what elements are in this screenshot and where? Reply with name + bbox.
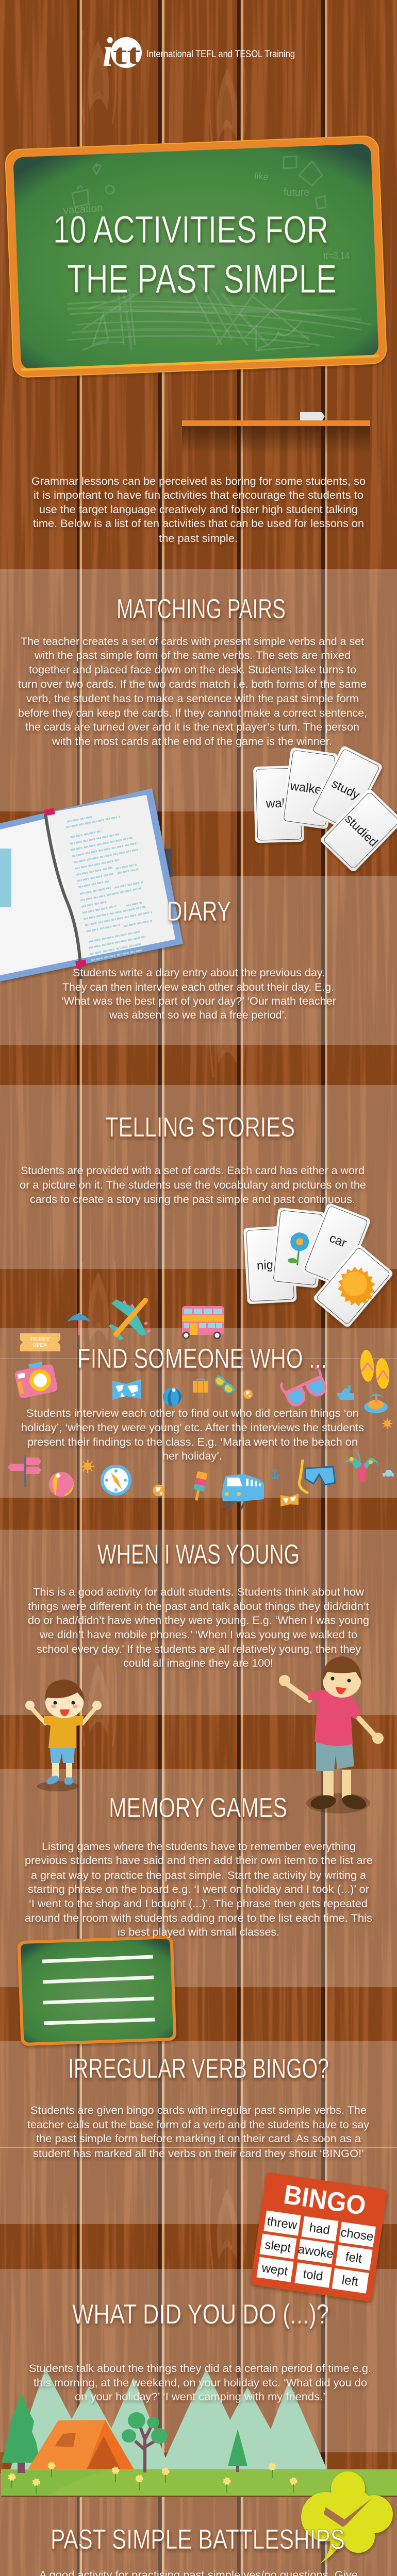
- icon: flip flops: [359, 1349, 390, 1389]
- chalkboard with title: [5, 135, 387, 378]
- body text: the cards are turned over and it is the next player’s turn. The person: [25, 721, 359, 733]
- body text: Students write a diary entry about the previous day.: [73, 967, 325, 979]
- body text: [21, 1408, 364, 1462]
- panel band: matching pairs: [0, 570, 397, 811]
- icon: beach umbrella: [67, 1313, 91, 1335]
- chalk smudges and doodles: [67, 156, 371, 350]
- icon: airplane: [109, 1299, 151, 1341]
- illustration: word cards: walked: [289, 779, 329, 798]
- icon: ticket: TICKET: [30, 1336, 50, 1342]
- panel: what did you do: [1, 2299, 397, 2497]
- icon: small globe: [243, 1389, 253, 1399]
- icon: small car: [383, 1470, 394, 1478]
- panel band: find someone who: [0, 1328, 397, 1498]
- illustration: open diary: [0, 788, 183, 981]
- icon: ticket: [20, 1333, 60, 1351]
- intro text: [31, 476, 366, 545]
- round tree: [122, 2412, 168, 2472]
- panel band: what did you do: [0, 2269, 397, 2452]
- panel band: when I was young: [0, 1530, 397, 1715]
- body text: is best played with small classes.: [118, 1926, 279, 1938]
- panel: telling stories: [20, 1112, 394, 1329]
- body text: was absent so we had a free period’.: [109, 1009, 287, 1021]
- panel band: telling stories: [0, 1085, 397, 1269]
- intro text: time. Below is a list of ten activities that can be used for lessons on: [33, 518, 364, 530]
- illustration: bingo card: BINGO: [282, 2180, 368, 2221]
- heading: TELLING STORIES: [105, 1112, 295, 1143]
- illustration: story cards: car: [327, 1231, 349, 1250]
- flowers: [9, 2463, 296, 2494]
- heading: DIARY: [167, 896, 231, 927]
- body text: this morning, at the weekend, on your holiday etc. ‘What did you do: [34, 2377, 367, 2389]
- icon: double decker bus: [182, 1306, 224, 1338]
- icon: globe: [153, 1485, 165, 1496]
- mountains: [10, 2368, 327, 2469]
- body text: Students are provided with a set of cards. Each card has either a word: [21, 1165, 365, 1177]
- heading: MEMORY GAMES: [109, 1792, 287, 1823]
- body text: around the room with students adding more to the list each time. This: [25, 1912, 372, 1924]
- illustration: bingo card: told: [302, 2267, 324, 2284]
- icon: ship: [337, 1385, 354, 1400]
- panel: when I was young: [25, 1539, 384, 1814]
- illustration: bingo card: awoke: [297, 2242, 335, 2261]
- icon: snorkel mask: [299, 1460, 335, 1493]
- body text: This is a good activity for adult students. Students think about how: [33, 1586, 365, 1598]
- body text: [29, 2363, 371, 2403]
- illustration: bingo card: had: [308, 2221, 331, 2238]
- body text: [28, 1586, 369, 1669]
- panel: find someone who: [8, 1299, 394, 1511]
- body text: [20, 1165, 366, 1206]
- panel band: memory games: [0, 1769, 397, 1987]
- icon: suitcase: [193, 1379, 208, 1393]
- intro text: the past simple.: [159, 533, 238, 545]
- body text: could all imagine they are 100!: [123, 1657, 273, 1669]
- illustration: word cards: [253, 745, 397, 873]
- illustration: big boy: [279, 1656, 384, 1814]
- grass: [1, 2469, 397, 2496]
- small pine tree: [228, 2429, 247, 2472]
- body text: teacher calls out the base form of a verb and the students have to say: [27, 2119, 369, 2131]
- body text: student has marked all the verbs on their card they shout ‘BINGO!’: [33, 2148, 364, 2160]
- chalk shelf with eraser: [182, 412, 370, 454]
- diary handwriting: [66, 817, 152, 960]
- panel band: diary: [0, 876, 397, 1045]
- body text: Students interview each other to find out who did certain things ‘on: [26, 1408, 359, 1419]
- body text: The teacher creates a set of cards with present simple verbs and a set: [21, 636, 364, 648]
- title: 10 ACTIVITIES FOR: [53, 208, 328, 251]
- body text: [18, 636, 367, 748]
- illustration: camping scene: [1, 2368, 397, 2497]
- icon: popsicle: [191, 1471, 208, 1501]
- illustration: bingo card: wept: [260, 2261, 289, 2279]
- body text: things were different in the past and talk about things they did/didn’t: [28, 1601, 369, 1613]
- illustration: bingo card: chose: [340, 2226, 374, 2244]
- body text: [27, 2105, 369, 2160]
- heading: FIND SOMEONE WHO ...: [77, 1343, 327, 1374]
- icon: beach ball: [49, 1472, 74, 1497]
- body text: with the past simple form of the same verbs. The sets are mixed: [34, 650, 351, 662]
- icon: camera: [13, 1360, 58, 1399]
- icon: small sunglasses: [213, 1375, 236, 1395]
- body text: on your holiday?’ ‘I went camping with my friends.’: [75, 2391, 325, 2403]
- intro text: it is important to have fun activities that encourage the students to: [34, 489, 363, 501]
- illustration: story cards: [243, 1202, 394, 1329]
- body text: cards to create a story using the past simple and past continuous.: [30, 1194, 355, 1206]
- icon: big pink sunglasses: [280, 1366, 328, 1408]
- illustration: bingo card: threw: [266, 2214, 299, 2232]
- illustration: bingo card: left: [341, 2273, 359, 2289]
- illustration: bingo card: slept: [264, 2238, 292, 2256]
- body text: Students talk about the things they did at a certain period of time e.g.: [29, 2363, 371, 2375]
- logo: itt International TEFL and TESOL Training: tt: [113, 39, 141, 71]
- logo: itt International TEFL and TESOL Training: International TEFL and TESOL Training: [146, 49, 295, 60]
- title: [53, 208, 337, 301]
- panel: past simple battleships: [6, 2471, 397, 2576]
- body text: present their findings to the class. E.g. ‘Maria went to the beach on: [27, 1436, 358, 1448]
- heading: WHAT DID YOU DO (...)?: [72, 2299, 329, 2330]
- intro text: use the target language creatively and foster high student talking: [39, 504, 358, 516]
- body text: verb, the student has to make a sentence with the past simple form: [26, 693, 359, 705]
- body text: her holiday’.: [162, 1450, 222, 1462]
- chalkboard with title: like: [254, 170, 269, 182]
- panel band: irregular verb bingo: [0, 2041, 397, 2224]
- icon: world map blue: [112, 1379, 141, 1400]
- body text: Listing games where the students have to remember everything: [42, 1841, 356, 1853]
- icon: blue beach ball: [163, 1387, 181, 1406]
- body text: before they can keep the cards. If they cannot make a correct sentence,: [18, 707, 367, 719]
- panel: memory games: [18, 1792, 373, 2046]
- chalkboard with title: π=3,14: [323, 250, 350, 262]
- tent: [28, 2420, 134, 2469]
- icon: anchor: [271, 1469, 279, 1479]
- body text: ‘What was the best part of your day?’ ‘Our math teacher: [61, 995, 336, 1007]
- body text: [25, 1841, 373, 1938]
- chalkboard with title: future: [284, 187, 309, 198]
- body text: school every day.’ If the students are all relatively young, then they: [37, 1643, 361, 1655]
- heading: MATCHING PAIRS: [117, 594, 286, 624]
- icon: signpost: [8, 1455, 41, 1487]
- body text: or a picture on it. The students use the vocabulary and pictures on the: [20, 1179, 366, 1191]
- icon: sun: [81, 1460, 94, 1473]
- icon: ticket: OPEN: [32, 1343, 47, 1348]
- body text: ‘I went to the shop and I bought (...)’. The phrase then gets repeated: [29, 1898, 368, 1910]
- body text: They can then interview each other about their day. E.g.: [62, 981, 334, 993]
- icon: compass: [101, 1465, 131, 1496]
- body text: together and placed face down on the desk. Students take turns to: [29, 664, 356, 676]
- body text: Students are given bingo cards with irregular past simple verbs. The: [30, 2105, 367, 2116]
- icon: island: [364, 1394, 388, 1413]
- body text: a great way to practice the past simple. Start the activity by writing a: [31, 1870, 366, 1882]
- illustration: small chalkboard: [18, 1936, 176, 2046]
- panel: irregular verb bingo: [27, 2053, 387, 2302]
- illustration: word cards: study: [329, 776, 362, 802]
- heading: WHEN I WAS YOUNG: [97, 1539, 300, 1570]
- chalkboard with title: vacation: [63, 202, 103, 216]
- illustration: story cards: night: [256, 1258, 284, 1273]
- logo: itt International TEFL and TESOL Training: i: [103, 30, 113, 75]
- illustration: bingo card: felt: [344, 2250, 363, 2266]
- illustration: small boy: [25, 1680, 102, 1791]
- icon: green speech cloud with check mark: [301, 2471, 393, 2564]
- body text: do or had/didn’t have when they were young. E.g. ‘When I was young: [28, 1615, 369, 1626]
- body text: [61, 967, 336, 1021]
- panel: matching pairs: [18, 594, 397, 873]
- body text: we didn’t have mobile phones.’ ‘When I was young we walked to: [39, 1629, 357, 1641]
- illustration: word cards: studied: [342, 812, 381, 850]
- body text: previous students have said and then add their own item to the list are: [25, 1855, 373, 1867]
- pine tree: [2, 2392, 40, 2473]
- icon: train: [222, 1474, 264, 1511]
- body text: the past simple form before marking it on their card. As soon as a: [36, 2133, 361, 2145]
- panel: diary: [0, 788, 336, 1021]
- body text: with the most cards at the end of the game is the winner.: [52, 736, 332, 748]
- illustration: word cards: walk: [266, 796, 291, 811]
- board frame: [5, 135, 387, 378]
- logo: itt International TEFL and TESOL Training: [103, 30, 295, 75]
- illustration: bingo card: [251, 2172, 387, 2302]
- intro text: Grammar lessons can be perceived as boring for some students, so: [31, 476, 366, 487]
- body text: turn over two cards. If the two cards match i.e. both forms of the same: [18, 679, 367, 690]
- body text: starting phrase on the board e.g. ‘I went on holiday and I took (...)’ or: [28, 1884, 369, 1895]
- icon: small sun: [382, 1418, 392, 1429]
- body text: holiday’, ‘when they were young’ etc. After the interviews the students: [21, 1422, 364, 1434]
- icon: orange map: [280, 1494, 299, 1506]
- icon: palm tree: [342, 1449, 379, 1482]
- panel band: past simple battleships: [0, 2473, 397, 2576]
